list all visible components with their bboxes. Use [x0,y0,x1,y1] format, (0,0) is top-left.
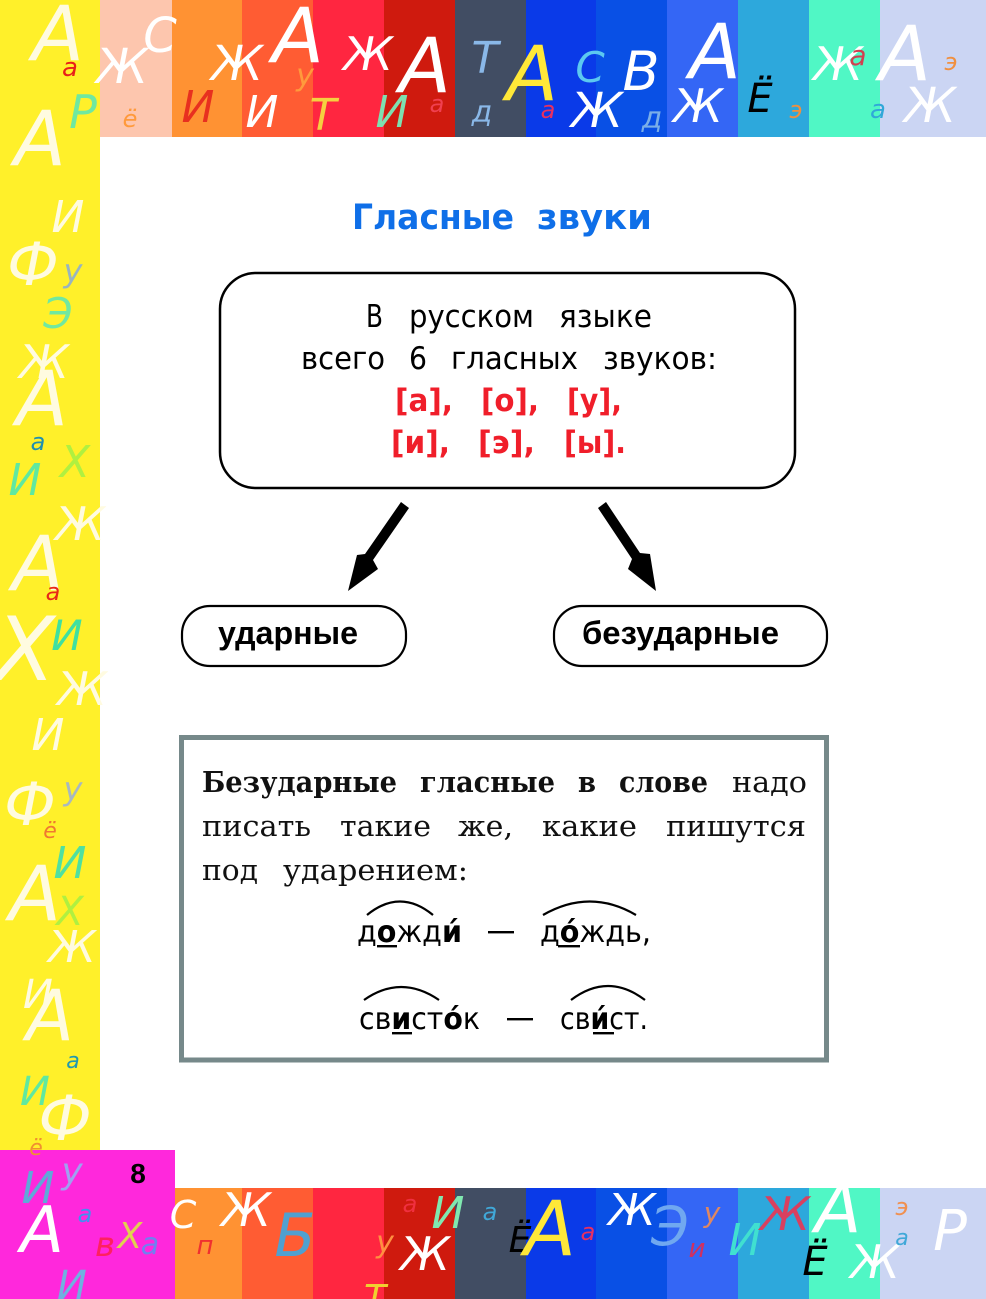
rule text: слове [619,765,708,799]
decorative letters: top band: э [789,96,803,124]
decorative letters: bottom band: а [483,1198,497,1226]
title: звуки [537,198,652,238]
statement text: русском [409,299,534,335]
decorative letters: top band: у [295,58,315,93]
decorative letters: left strip: И [54,838,86,889]
decorative letters: bottom band: Ж [397,1227,452,1281]
statement text: языке [559,299,652,335]
arrow: to unstressed [598,502,656,591]
rule text: пишутся [666,809,806,843]
decorative letters: bottom band: Ж [847,1235,902,1289]
panel: six vowel sounds [220,273,795,488]
panel: rule with examples [182,738,826,1060]
title [352,198,652,238]
decorative letters: top band [9,0,958,183]
title: Гласные [352,198,514,238]
decorative letters: bottom band: И [432,1188,464,1239]
decorative letters: bottom band [170,1170,967,1299]
vowel list in red: [о], [481,383,539,419]
decorative letters: top band: Ж [93,39,150,95]
decorative letters: left strip: Х [58,437,91,488]
pill: unstressed: безударные [582,615,779,651]
decorative letters: left strip: Ф [38,1082,92,1155]
decorative letters: left strip: ё [43,819,57,844]
decorative letters: left strip: а [31,428,45,456]
decorative letters: left strip: Ф [4,770,56,840]
decorative letters: top band: В [622,40,660,103]
decorative letters: bottom band: а [895,1226,909,1251]
decorative letters: bottom band: А [519,1184,576,1273]
magenta page number block [0,1150,175,1299]
decorative letters: top band: Т [472,33,502,84]
decorative letters: left strip: А [22,975,74,1057]
vowel list in red: [а], [395,383,453,419]
decorative letters: top band: А [684,7,741,96]
decorative letters: top band: а [849,39,867,72]
decorative letters: top band: А [874,9,931,98]
decorative letters: top band: Р [69,85,97,139]
example: дожди — дождь: до́ждь, [540,915,651,950]
statement text: гласных [451,341,578,377]
decorative letters: top band: Ж [568,83,625,139]
decorative letters: left strip: Ж [54,662,109,716]
rule text: гласные [420,765,555,799]
decorative letters: top band: А [394,21,451,110]
decorative letters: bottom band: А [811,1170,861,1249]
vowel list in red: [э], [478,425,535,461]
decorative letters: bottom band: а [403,1190,417,1218]
statement text: всего [301,341,385,377]
example: свисток — свист: свисто́к [359,1002,480,1037]
decorative letters: top band: Ж [208,36,265,92]
decorative letters: magenta block: И [22,1163,54,1214]
decorative letters: top band: ё [123,105,137,133]
decorative letters: left strip: а [66,1049,80,1074]
rule text: надо [732,765,807,799]
decorative letters: left strip: А [7,519,64,608]
decorative letters: bottom band: у [375,1225,395,1260]
decorative letters: bottom band: Э [650,1195,689,1258]
decorative letters: top band: а [430,90,444,118]
decorative letters: left strip: И [52,192,84,243]
decorative letters: left strip: у [63,770,84,808]
decorative letters: left strip: Ж [16,335,71,389]
decorative letters: bottom band: Р [933,1199,967,1264]
decorative letters: left strip: А [4,849,61,938]
decorative letters: left strip: И [51,611,83,660]
decorative letters: left strip: А [11,354,68,443]
decorative letters: magenta block: у [60,1151,83,1192]
decorative letters: top band: И [376,87,408,138]
decorative letters: bottom band: Ж [757,1187,812,1241]
decorative letters: left strip: Ж [45,922,97,973]
decorative letters: top band: а [870,95,886,125]
decorative letters: top band: Т [310,90,340,141]
pill: stressed [182,606,406,666]
vowel list in red: [и], [391,425,450,461]
rule text [202,765,807,887]
decorative letters: bottom band: а [581,1218,595,1246]
decorative letters: bottom band: э [895,1193,909,1221]
decorative letters: magenta block: ё [29,1136,43,1161]
decorative letters: magenta block: а [78,1200,92,1228]
statement text [301,299,717,377]
decorative letters: left strip: Х [54,889,85,935]
decorative letters: top band: Ё [747,74,773,122]
rule text: какие [542,809,637,843]
pill: stressed: ударные [218,615,358,651]
rule text: в [578,765,596,799]
top colour band [100,0,986,137]
decorative letters: top band: Ж [901,78,958,134]
decorative letters: bottom band: у [703,1196,721,1229]
decorative letters: bottom band: Б [274,1201,316,1271]
rule text: ударением: [283,853,468,887]
statement text: В [366,299,383,335]
decorative letters: left strip: И [32,710,64,761]
decorative letters: top band: С [143,8,177,64]
decorative letters: top band: А [9,94,66,183]
decorative letters: magenta block: в [95,1225,115,1265]
decorative letters: left strip [0,192,109,1155]
decorative letters: bottom band: С [170,1193,197,1237]
vowel list in red: [у], [567,383,622,419]
decorative letters: top band: Ж [810,37,865,91]
decorative letters: magenta block: а [141,1227,159,1262]
decorative letters: left strip: И [20,1069,50,1115]
decorative letters: top band: И [246,87,278,138]
decorative letters: top band: Ж [670,79,725,133]
rule text: писать [202,809,311,843]
left yellow strip [0,0,100,1150]
decorative letters: bottom band: И [729,1215,761,1266]
rule text: Безударные [202,765,397,799]
decorative letters: magenta block: Х [116,1216,144,1257]
decorative letters: top band: д [471,95,492,130]
decorative letters: top band: а [541,96,555,124]
rule text: же, [458,809,513,843]
rule text: такие [340,809,431,843]
decorative letters: bottom band: и [689,1234,705,1264]
decorative letters: top band: А [501,29,558,118]
page number: 8 [130,1158,146,1189]
example: свисток — свист: сви́ст. [560,1002,648,1037]
decorative letters: top band: а [62,53,78,83]
vowel list in red [391,383,626,461]
decorative letters: left strip: у [63,252,84,290]
decorative letters: top band: э [944,48,958,76]
decorative letters: top band: С [575,43,605,92]
decorative letters: left strip: И [9,455,41,506]
decorative letters: bottom band: Ж [605,1185,657,1236]
decorative letters: left strip: Ж [52,497,107,551]
example: дожди — дождь: дожди́ [357,915,462,950]
decorative letters: left strip: Э [42,289,73,338]
bottom colour band [175,1188,986,1299]
example: свисток — свист [359,986,648,1037]
decorative letters: bottom band: Ё [802,1237,828,1285]
arrow: to stressed [348,502,409,591]
decorative letters: top band: И [182,82,214,133]
decorative letters: top band: Ж [340,27,395,81]
decorative letters: top band: д [641,101,662,136]
pill: unstressed [554,606,827,666]
statement text: 6 [409,341,427,377]
example: дожди — дождь [357,902,651,950]
decorative letters: left strip: Ф [7,230,59,300]
statement text: звуков: [603,341,717,377]
decorative letters: left strip: а [46,578,60,606]
decorative letters: magenta block [16,1136,159,1299]
vowel list in red: [ы]. [564,425,626,461]
decorative letters: bottom band: Ж [218,1183,273,1237]
rule text: под [202,853,258,887]
decorative letters: left strip: И [23,972,53,1018]
decorative letters: bottom band: п [196,1231,214,1261]
decorative letters: magenta block: А [16,1194,64,1268]
decorative letters: bottom band: Ё [509,1219,532,1261]
